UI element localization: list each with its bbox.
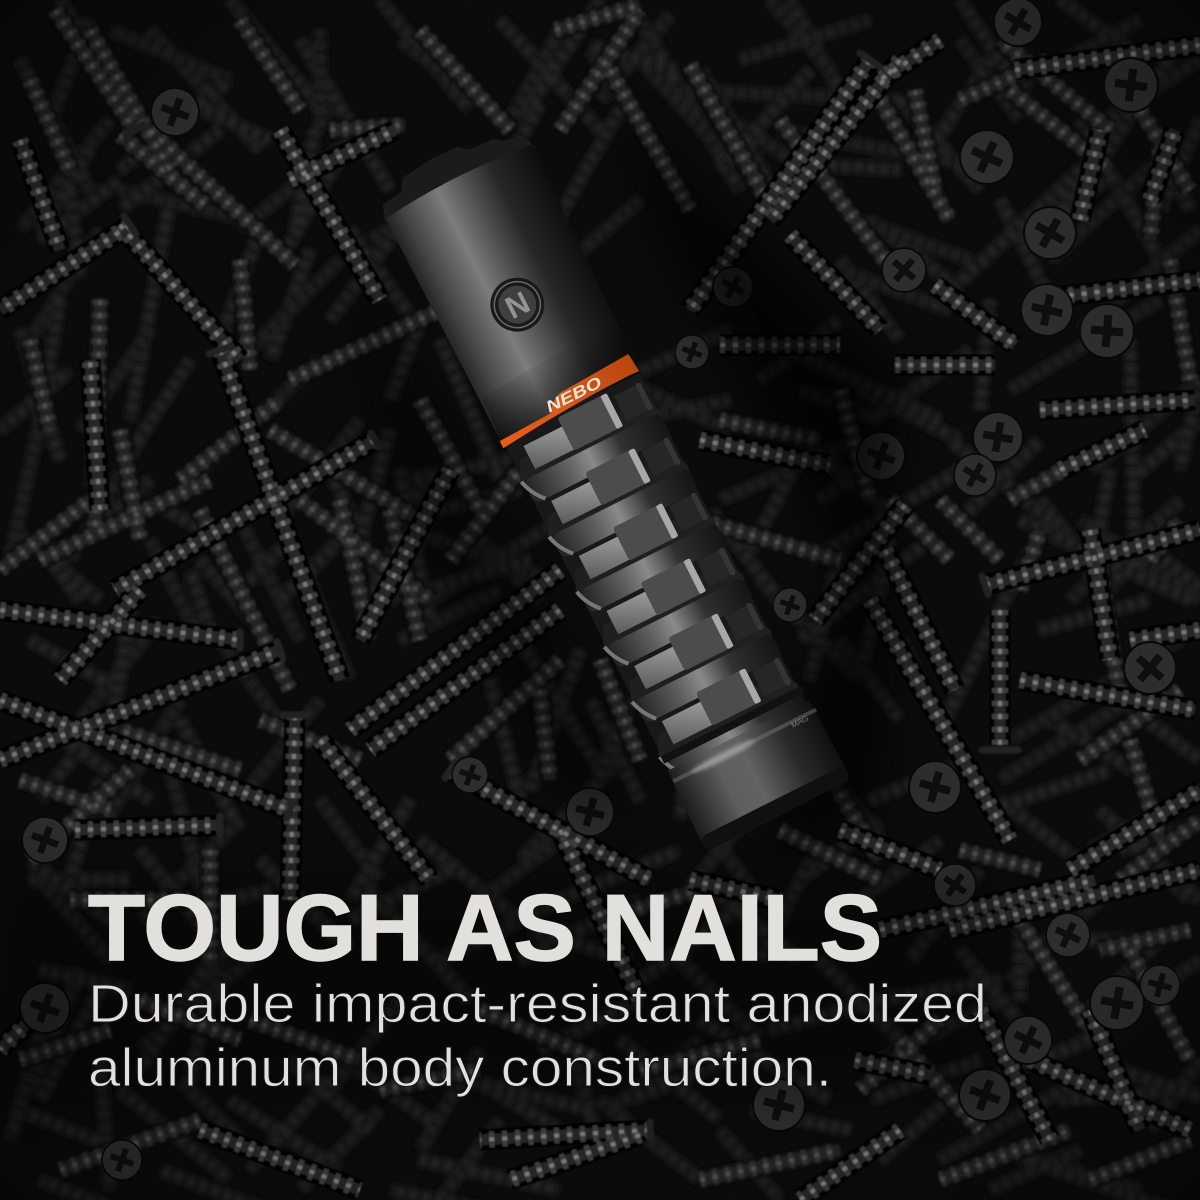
orange NEBO ring: NEBO	[543, 374, 605, 416]
orange NEBO ring	[491, 353, 643, 448]
grip base	[503, 373, 799, 759]
flashlight head barrel	[383, 140, 645, 444]
body text	[88, 974, 987, 1098]
flashlight end cap	[659, 685, 851, 852]
power button with N logo	[481, 268, 554, 341]
flashlight	[369, 115, 853, 854]
flashlight head crown	[369, 115, 536, 223]
grip rows	[503, 375, 811, 780]
flashlight neck shading	[475, 320, 640, 442]
body text: aluminum body construction.	[88, 1038, 832, 1098]
headline: TOUGH AS NAILS	[88, 875, 882, 980]
flashlight end cap: MAG	[790, 714, 810, 730]
body text: Durable impact-resistant anodized	[88, 974, 987, 1034]
power button with N logo: N	[500, 284, 535, 326]
